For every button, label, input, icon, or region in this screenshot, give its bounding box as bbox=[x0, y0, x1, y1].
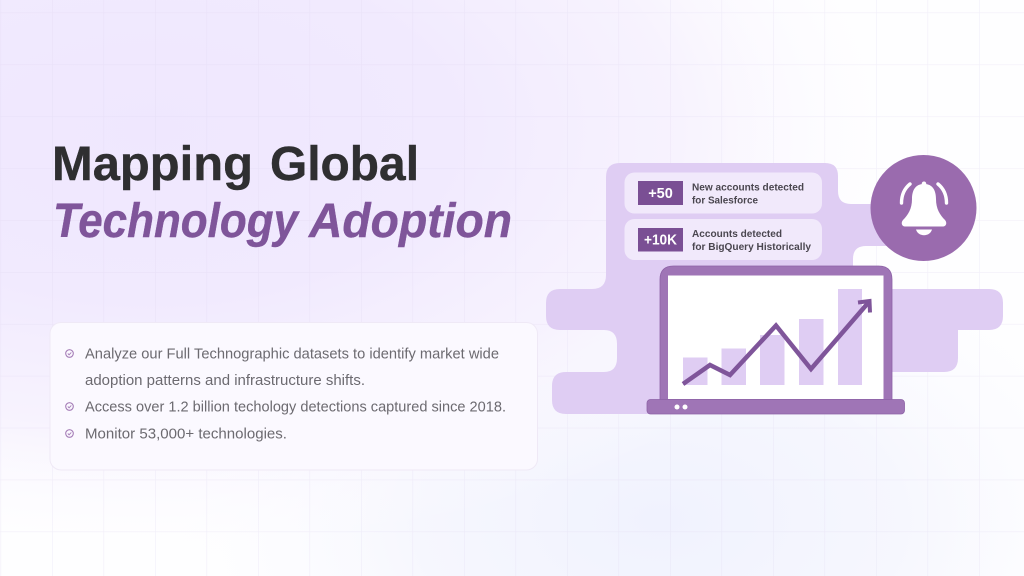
alert card: Salesforce bbox=[624, 172, 822, 214]
icon: bell bbox=[870, 155, 976, 261]
alert card: Salesforce: +50 bbox=[648, 186, 673, 202]
title: Adoption bbox=[308, 195, 512, 248]
list item: technologies: Monitor 53,000+ technologies. bbox=[85, 426, 287, 442]
icon: laptop bbox=[647, 266, 904, 414]
alert card: Salesforce: for Salesforce bbox=[692, 194, 758, 206]
list item: market wide adoption: Analyze our Full Technographic datasets to identify market wide bbox=[85, 346, 499, 362]
alert card: BigQuery: Accounts detected bbox=[692, 228, 782, 240]
alert card: BigQuery: for BigQuery Historically bbox=[692, 241, 811, 253]
alert card: Salesforce: New accounts detected bbox=[692, 182, 804, 194]
trend arrow bbox=[683, 301, 870, 384]
bar chart bbox=[683, 289, 862, 385]
alert card: BigQuery bbox=[624, 219, 822, 260]
title bbox=[52, 138, 512, 248]
list item: detections: Access over 1.2 billion techology detections captured since 2018. bbox=[85, 400, 506, 416]
title: Technology bbox=[53, 195, 300, 248]
title: Global bbox=[270, 138, 419, 191]
list item: market wide adoption bbox=[66, 346, 499, 389]
list item: market wide adoption: adoption patterns and infrastructure shifts. bbox=[85, 373, 365, 389]
illustration: alert and chart bbox=[546, 155, 1003, 414]
panel: feature list bbox=[50, 322, 538, 470]
alert card: BigQuery: +10K bbox=[644, 232, 677, 248]
title: Mapping bbox=[52, 138, 253, 191]
background blob bbox=[546, 163, 1003, 414]
